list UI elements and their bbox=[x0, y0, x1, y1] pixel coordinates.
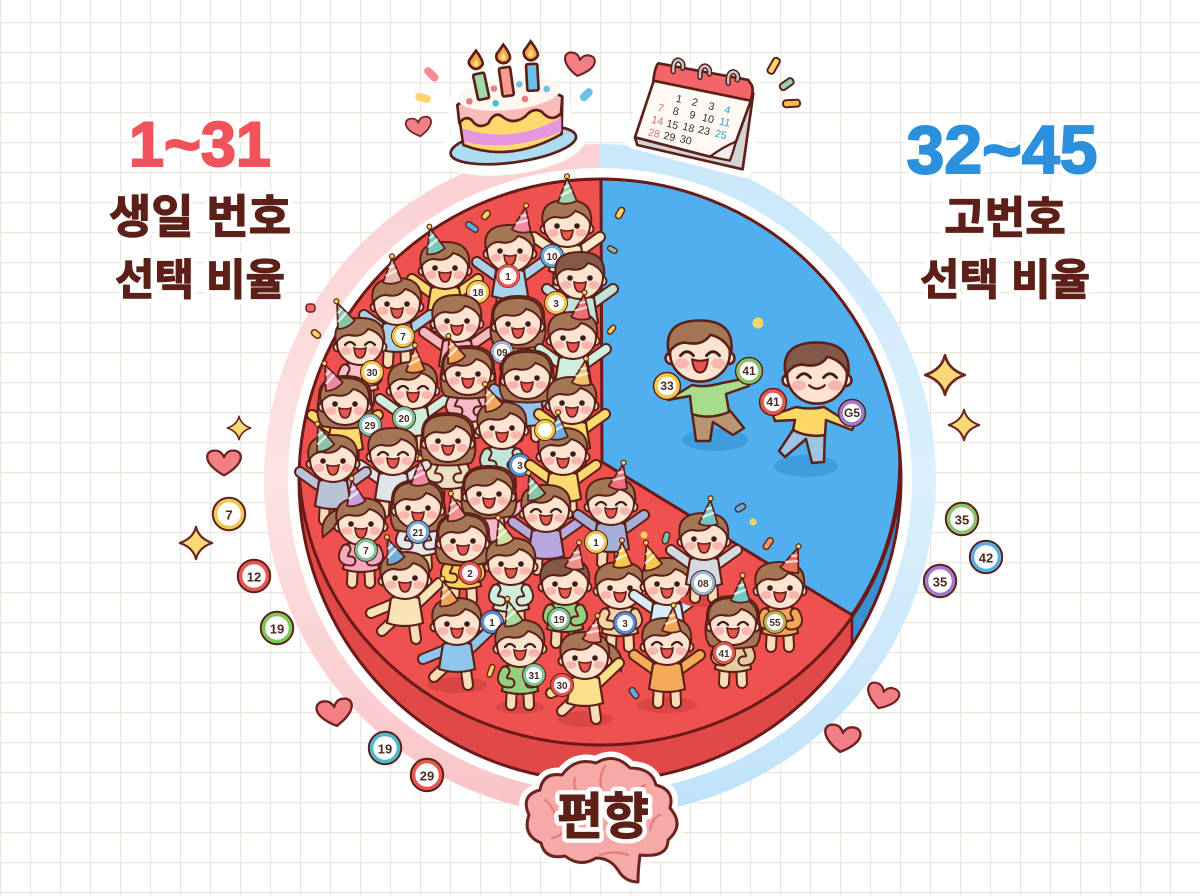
ball 12 bbox=[238, 560, 270, 592]
child slate with ball 1: 1 bbox=[593, 538, 599, 549]
ball 35 green bbox=[946, 503, 978, 535]
child slate with ball 1 bbox=[578, 458, 644, 563]
icon: calendar: 2 bbox=[690, 96, 699, 109]
brain with bias label bbox=[526, 759, 677, 882]
icon: calendar: 25 bbox=[713, 128, 728, 142]
child long hair pink bbox=[456, 466, 522, 553]
heading: 32~45: 32~45 bbox=[907, 112, 1097, 188]
child holding ball 19 bbox=[538, 538, 592, 643]
ball 35 purple bbox=[924, 565, 956, 597]
heading: 1~31: 1~31 bbox=[129, 110, 271, 180]
child holding ball 55: 55 bbox=[769, 618, 781, 629]
icon: calendar: 18 bbox=[681, 121, 696, 135]
ball 08: 08 bbox=[697, 579, 709, 590]
icon: calendar: 4 bbox=[723, 104, 732, 117]
text: birthday number: 생일 번호 bbox=[109, 191, 291, 243]
ball 10 bbox=[541, 245, 563, 267]
child holding ball 41: 41 bbox=[718, 649, 730, 660]
text: birthday number: 생일 번호 bbox=[109, 191, 291, 243]
confetti bbox=[306, 206, 774, 700]
child in yellow dress with ball 30 bbox=[551, 611, 622, 727]
child in yellow dress with ball 30: 30 bbox=[556, 681, 568, 692]
ball 29 bbox=[411, 759, 443, 791]
child holding ball 55 bbox=[754, 541, 809, 647]
text: high numbers: 고번호 bbox=[944, 194, 1066, 243]
child in pink bbox=[424, 295, 490, 380]
child 1 on blue section holding 33 and 41: 33 bbox=[660, 379, 674, 393]
child holding a ball bbox=[436, 489, 490, 600]
icon: calendar: 11 bbox=[718, 116, 732, 130]
icon: marks beside the calendar bbox=[766, 57, 800, 107]
ball 7 bbox=[213, 498, 245, 530]
child holding ball 30: 30 bbox=[366, 368, 378, 379]
child holding ball 3 bbox=[594, 538, 646, 647]
child with ponytail holding ball 7 bbox=[322, 474, 388, 583]
icon: calendar: 14 bbox=[650, 114, 665, 128]
icon: calendar: 15 bbox=[665, 118, 680, 132]
text: selection ratio left: 선택 비율 bbox=[115, 257, 285, 305]
child holding ball 1: 1 bbox=[489, 618, 495, 629]
child holding ball 3 bbox=[476, 378, 531, 487]
child at back right bbox=[671, 495, 737, 607]
text: selection ratio right: 선택 비율 bbox=[920, 257, 1090, 305]
child yellow with hat bbox=[530, 410, 596, 513]
ring: pink birthday arc and blue high-number arc bbox=[264, 144, 936, 816]
child purple bbox=[513, 468, 579, 570]
child left edge bbox=[300, 419, 366, 520]
child bbox=[534, 174, 600, 285]
icon: calendar: 28 bbox=[647, 126, 661, 141]
child holding ball 41 bbox=[706, 572, 760, 683]
child arms up bbox=[540, 288, 606, 397]
text: high numbers: 고번호 bbox=[944, 194, 1066, 243]
ball 19 green: 19 bbox=[270, 622, 284, 636]
icon: calendar: 29 bbox=[662, 130, 677, 144]
child light blue bbox=[634, 538, 700, 643]
child 1 on blue section holding 33 and 41: 41 bbox=[742, 364, 756, 378]
child holding ball 29 bbox=[312, 357, 381, 463]
child 2 on blue section holding 41 and G5 bbox=[760, 342, 865, 477]
icon: calendar: 30 bbox=[678, 133, 693, 148]
ball 08 bbox=[691, 571, 715, 595]
child holding ball 1 bbox=[423, 574, 503, 693]
child holding ball 20: 20 bbox=[398, 414, 410, 425]
icon: calendar: 3 bbox=[707, 100, 716, 113]
icon: birthday cake bbox=[446, 41, 581, 174]
child in yellow bbox=[539, 354, 605, 462]
child holding ball 3: 3 bbox=[517, 461, 523, 472]
ball 19 teal bbox=[369, 732, 401, 764]
child holding ball 09 bbox=[491, 296, 545, 383]
ball 19 teal: 19 bbox=[378, 742, 392, 756]
child cream running bbox=[371, 531, 439, 639]
child 2 on blue section holding 41 and G5: G5 bbox=[844, 406, 860, 420]
heading: 32~45: 32~45 bbox=[907, 112, 1097, 188]
ball 29: 29 bbox=[420, 768, 434, 784]
child holding ball 18 bbox=[412, 222, 489, 327]
ball 7: 7 bbox=[225, 508, 233, 522]
ball 35 green: 35 bbox=[955, 512, 969, 528]
child holding ball 19: 19 bbox=[553, 615, 565, 626]
child holding ball 09: 09 bbox=[496, 348, 508, 359]
icon: calendar: 1 bbox=[675, 93, 683, 106]
ball 10: 10 bbox=[546, 252, 558, 263]
text: selection ratio left: 선택 비율 bbox=[115, 257, 285, 305]
child holding ball 21: 21 bbox=[412, 528, 424, 539]
ball 12: 12 bbox=[247, 570, 261, 584]
child with dark hair bbox=[545, 252, 613, 337]
child holding ball 18: 18 bbox=[472, 288, 484, 299]
icon: calendar bbox=[635, 60, 753, 169]
child holding ball 1 bbox=[477, 201, 543, 310]
icons: sparkles bbox=[180, 355, 979, 559]
brain with bias label: 편향 bbox=[557, 789, 649, 845]
heading: 1~31: 1~31 bbox=[129, 110, 271, 180]
child with long hair bbox=[421, 413, 475, 500]
child holding ball 3: 3 bbox=[622, 619, 628, 630]
child holding ball 7: 7 bbox=[400, 332, 406, 343]
pie chart base bbox=[290, 170, 912, 790]
ball 19 green bbox=[261, 612, 293, 644]
icon: calendar: 7 bbox=[656, 102, 665, 115]
ball 42 bbox=[970, 541, 1002, 573]
child holding ball 21 bbox=[391, 456, 445, 567]
icon: calendar: 10 bbox=[701, 112, 715, 126]
text: selection ratio right: 선택 비율 bbox=[920, 257, 1090, 305]
ball 42: 42 bbox=[979, 550, 993, 566]
child in blue bbox=[494, 350, 560, 437]
brain with bias label: 편향 bbox=[557, 789, 649, 845]
child holding ball 7 bbox=[364, 254, 430, 363]
icon: calendar: 9 bbox=[688, 109, 697, 122]
icon: calendar: 23 bbox=[697, 124, 711, 138]
ball 35 purple: 35 bbox=[933, 574, 947, 590]
child with ponytail holding ball 7: 7 bbox=[363, 546, 369, 557]
child holding ball 29: 29 bbox=[364, 421, 376, 432]
icon: confetti and hearts around the cake bbox=[405, 51, 596, 138]
icon: calendar: 8 bbox=[671, 105, 680, 118]
child holding ball 31 bbox=[494, 594, 546, 714]
child holding ball 1: 1 bbox=[505, 272, 511, 283]
child grey shirt bbox=[360, 428, 426, 513]
child 1 on blue section holding 33 and 41 bbox=[654, 320, 762, 451]
crowd of children on the red section bbox=[300, 174, 809, 727]
child holding ball 30 bbox=[327, 295, 386, 403]
child holding ball 20 bbox=[380, 343, 446, 447]
icons: hearts bbox=[207, 451, 901, 754]
child in orange bbox=[634, 602, 700, 713]
child holding a ball: 2 bbox=[467, 569, 473, 580]
child teal bbox=[484, 513, 538, 623]
child with dark hair: 3 bbox=[553, 299, 559, 310]
child 2 on blue section holding 41 and G5: 41 bbox=[766, 395, 780, 409]
child with fringe bbox=[439, 331, 495, 433]
child holding ball 31: 31 bbox=[528, 671, 540, 682]
